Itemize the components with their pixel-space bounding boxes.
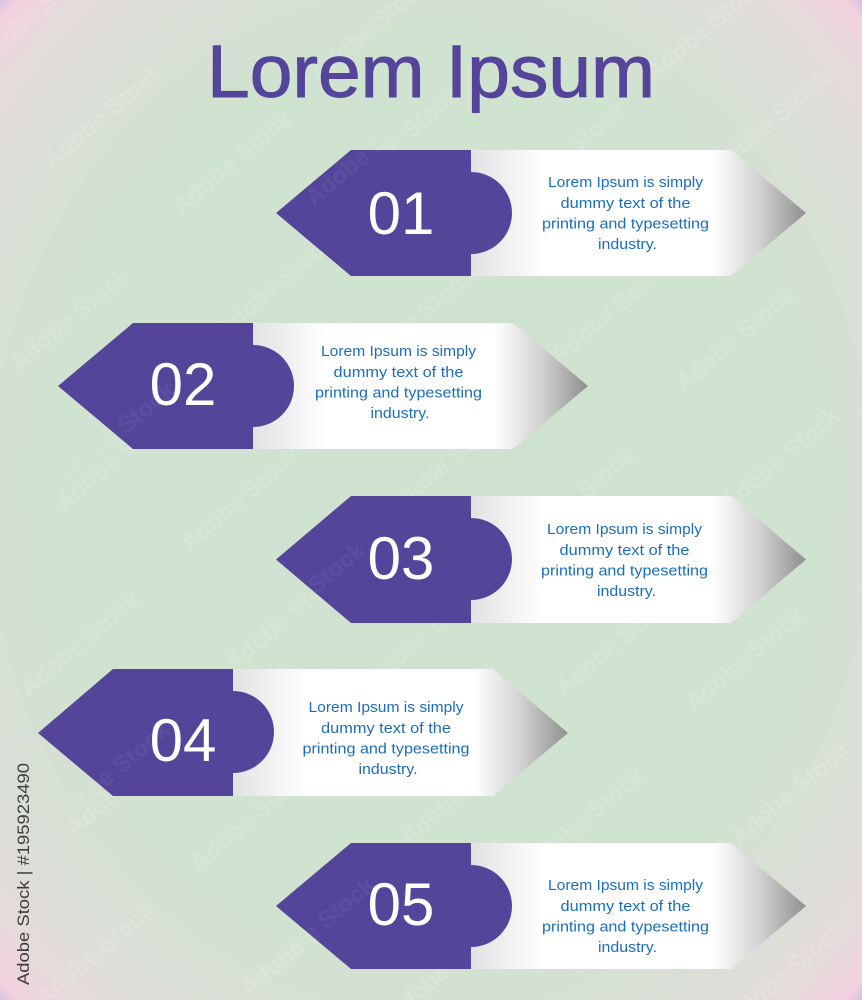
watermark pattern: Adobe Stock bbox=[220, 561, 351, 677]
watermark pattern: Adobe Stock bbox=[510, 441, 641, 557]
watermark pattern: Adobe Stock bbox=[210, 228, 341, 344]
text block 01: Lorem Ipsum is simply bbox=[548, 174, 704, 191]
watermark pattern: Adobe Stock bbox=[335, 81, 466, 197]
text block 02: printing and typesetting bbox=[315, 384, 482, 402]
text block 05: dummy text of the bbox=[560, 898, 690, 915]
text block 01: industry. bbox=[598, 236, 657, 253]
white arrow body bbox=[471, 843, 806, 969]
text block 03: industry. bbox=[597, 583, 656, 600]
watermark pattern: Adobe Stock bbox=[38, 58, 169, 174]
faint watermarks over purple panels: Adobe Stock bbox=[45, 716, 176, 832]
watermark pattern: Adobe Stock bbox=[185, 761, 316, 877]
number 02: 02 bbox=[150, 351, 216, 418]
watermark pattern: Adobe Stock bbox=[520, 761, 651, 877]
title: Lorem Ipsum bbox=[207, 30, 655, 113]
watermark pattern: Adobe Stock bbox=[350, 261, 481, 377]
text block 05: industry. bbox=[598, 939, 657, 956]
watermark pattern: Adobe Stock bbox=[5, 261, 136, 377]
text block 01 bbox=[542, 174, 709, 253]
panel: step 01 bbox=[276, 150, 806, 276]
faint watermarks over purple panels: Adobe Stock bbox=[50, 376, 181, 492]
text block 05: Lorem Ipsum is simply bbox=[548, 877, 704, 894]
watermark pattern: Adobe Stock bbox=[380, 406, 511, 522]
text block 03: dummy text of the bbox=[560, 542, 690, 559]
text block 01: dummy text of the bbox=[560, 195, 690, 212]
faint watermarks over purple panels bbox=[45, 96, 431, 987]
purple arrow head bbox=[38, 669, 274, 796]
text block 02: industry. bbox=[370, 405, 430, 422]
watermark pattern: Adobe Stock bbox=[167, 104, 298, 220]
purple arrow head bbox=[276, 150, 512, 276]
watermark pattern: Adobe Stock bbox=[60, 726, 191, 842]
text block 05 bbox=[542, 877, 709, 956]
faint watermarks over purple panels: Adobe Stock bbox=[240, 536, 371, 652]
purple arrow head bbox=[58, 323, 294, 449]
watermark pattern: Adobe Stock bbox=[360, 576, 491, 692]
text block 03 bbox=[541, 521, 708, 600]
white arrow body bbox=[253, 323, 588, 449]
panel: step 03 bbox=[276, 496, 806, 623]
watermark pattern: Adobe Stock bbox=[235, 886, 366, 1000]
text block 04: Lorem Ipsum is simply bbox=[308, 699, 464, 716]
watermark pattern: Adobe Stock bbox=[545, 254, 676, 370]
text block 02: dummy text of the bbox=[334, 364, 464, 381]
watermark pattern: Adobe Stock bbox=[725, 736, 856, 852]
text block 04: dummy text of the bbox=[321, 720, 451, 737]
purple arrow head bbox=[276, 496, 512, 623]
watermark pattern: Adobe Stock bbox=[550, 586, 681, 702]
faint watermarks over purple panels: Adobe Stock bbox=[300, 96, 431, 212]
watermark pattern: Adobe Stock bbox=[15, 586, 146, 702]
panel: step 04 bbox=[38, 669, 568, 796]
text block 01: printing and typesetting bbox=[542, 216, 709, 232]
watermark pattern: Adobe Stock bbox=[500, 96, 631, 212]
text block 04: industry. bbox=[358, 761, 418, 778]
watermark pattern: Adobe Stock bbox=[50, 401, 181, 517]
text block 02 bbox=[315, 343, 482, 422]
text block 05: printing and typesetting bbox=[542, 918, 709, 936]
number 05: 05 bbox=[368, 871, 434, 938]
white arrow body bbox=[471, 496, 806, 623]
number 01: 01 bbox=[368, 180, 434, 247]
watermark pattern: Adobe Stock bbox=[715, 401, 846, 517]
text block 04: printing and typesetting bbox=[302, 740, 470, 758]
panel: step 05 bbox=[276, 843, 806, 969]
faint watermarks over purple panels: Adobe Stock bbox=[250, 871, 381, 987]
watermark pattern: Adobe Stock bbox=[175, 441, 306, 557]
white arrow body bbox=[471, 150, 806, 276]
watermark pattern: Adobe Stock bbox=[395, 736, 526, 852]
watermark pattern: Adobe Stock bbox=[680, 601, 811, 717]
text block 04 bbox=[302, 699, 470, 778]
stock id label: Adobe Stock | #195923490 bbox=[14, 763, 33, 985]
watermark pattern: Adobe Stock bbox=[670, 281, 801, 397]
watermark pattern: Adobe Stock bbox=[705, 64, 836, 180]
text block 02: Lorem Ipsum is simply bbox=[321, 343, 477, 360]
text block 03: printing and typesetting bbox=[541, 562, 708, 580]
panel: step 02 bbox=[58, 323, 588, 449]
text block 03: Lorem Ipsum is simply bbox=[547, 521, 703, 538]
number 04: 04 bbox=[150, 707, 216, 774]
purple arrow head bbox=[276, 843, 512, 969]
white arrow body bbox=[233, 669, 568, 796]
number 03: 03 bbox=[368, 525, 434, 592]
